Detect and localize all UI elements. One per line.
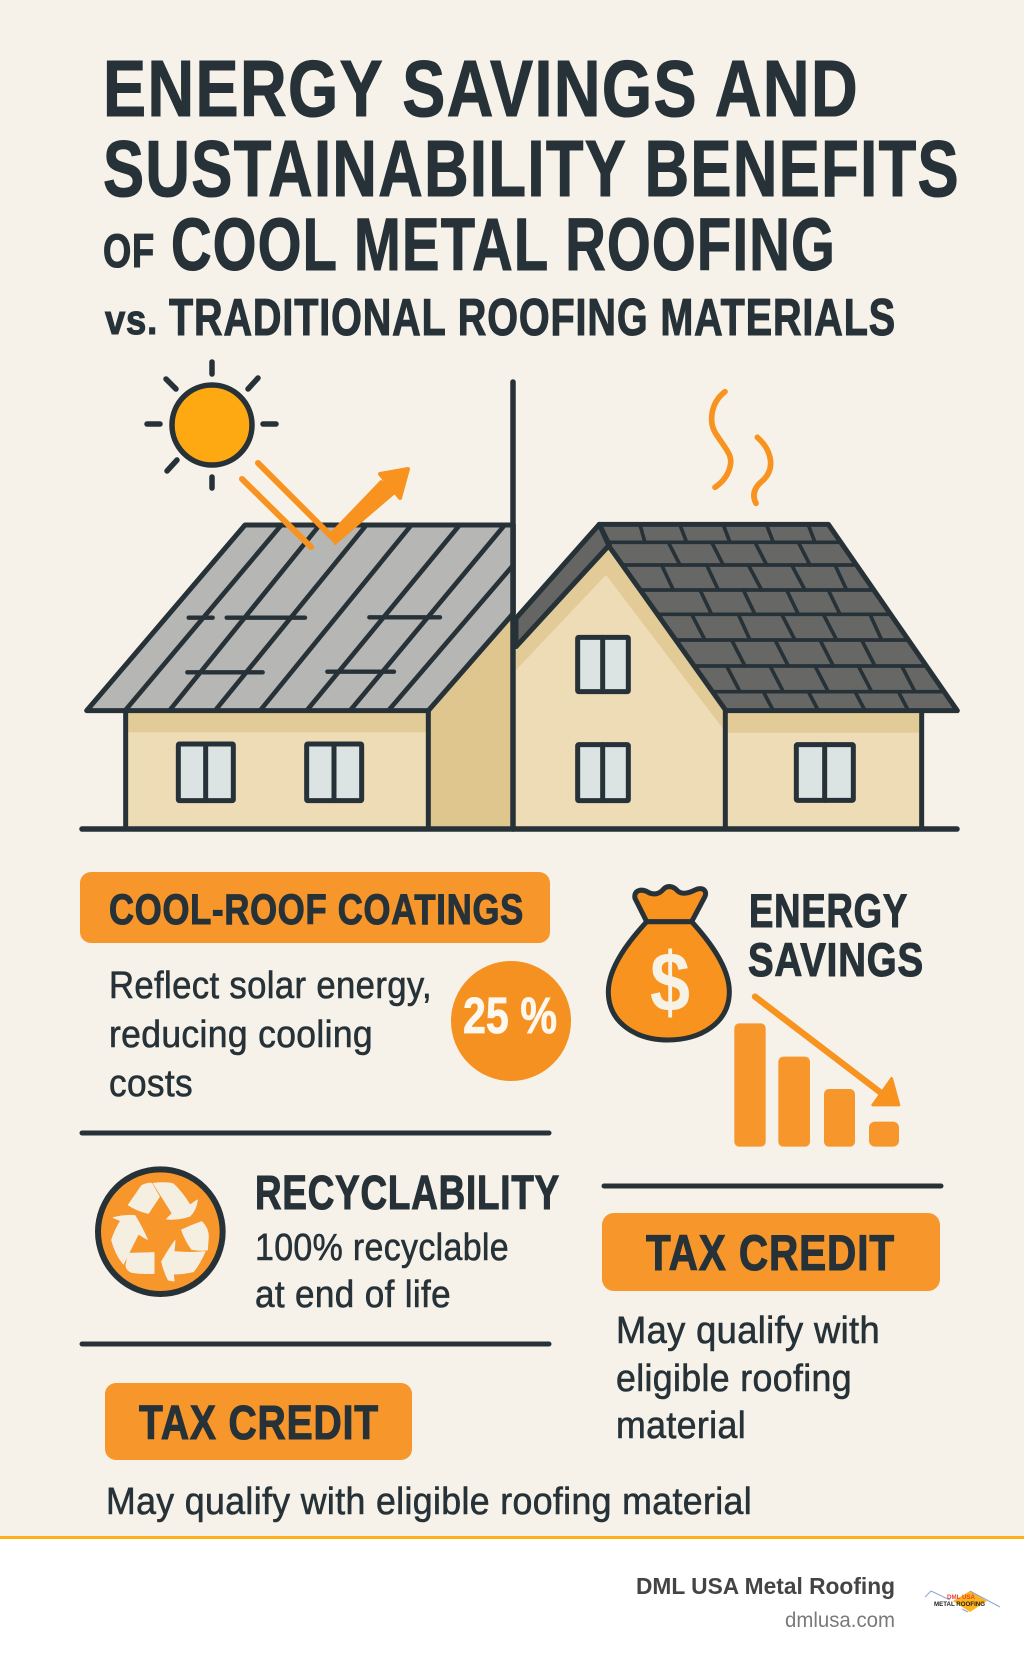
heading <box>748 884 924 986</box>
heading: ENERGY <box>749 884 908 937</box>
window <box>578 637 628 692</box>
divider between houses <box>510 382 516 829</box>
description: May qualify with eligible roofing material <box>106 1481 752 1523</box>
website: dmlusa.com <box>785 1609 895 1632</box>
icon: money bag <box>608 887 729 1040</box>
panel: tax credit left <box>105 1383 752 1523</box>
window <box>178 744 233 801</box>
description <box>109 965 432 1105</box>
icon: heat waves <box>712 392 771 503</box>
panel: tax credit right <box>602 1213 940 1447</box>
panel: energy savings <box>608 884 924 1147</box>
heading pill <box>105 1383 412 1460</box>
shingle roof <box>516 524 957 711</box>
description: 100% recyclable <box>255 1227 509 1269</box>
heading pill: TAX CREDIT <box>646 1225 895 1281</box>
description: material <box>616 1405 746 1447</box>
window <box>796 745 853 800</box>
description: May qualify with <box>616 1310 880 1352</box>
title: COOL METAL ROOFING <box>171 203 836 286</box>
description <box>616 1310 880 1447</box>
description: Reflect solar energy, <box>109 965 432 1007</box>
footer <box>0 1536 1024 1666</box>
window <box>578 745 628 801</box>
description <box>255 1227 509 1316</box>
window <box>307 744 362 801</box>
metal roof <box>87 525 513 711</box>
chart: decreasing bars with arrow <box>734 997 899 1147</box>
heading: SAVINGS <box>748 933 924 986</box>
title <box>103 44 960 347</box>
heading pill: TAX CREDIT <box>139 1397 379 1450</box>
ground line <box>82 826 957 832</box>
heading pill <box>602 1213 940 1291</box>
illustration: right house with shingle roof <box>513 392 957 829</box>
arrow: reflected sunlight <box>242 463 408 547</box>
title: ENERGY SAVINGS AND <box>103 44 859 133</box>
description: reducing cooling <box>109 1014 373 1056</box>
panel: cool-roof coatings <box>80 872 571 1105</box>
title: vs. <box>105 296 158 343</box>
description: at end of life <box>255 1274 451 1316</box>
title: OF <box>103 224 155 277</box>
heading: RECYCLABILITY <box>255 1167 560 1220</box>
icon: recycle <box>98 1169 223 1294</box>
description: eligible roofing <box>616 1358 852 1400</box>
heading pill: COOL-ROOF COATINGS <box>109 886 524 934</box>
badge: 25 percent <box>451 961 571 1081</box>
brand name: DML USA Metal Roofing <box>636 1573 895 1599</box>
heading pill <box>80 872 550 943</box>
logo: DML USA <box>947 1594 975 1601</box>
logo: METAL ROOFING <box>934 1602 985 1608</box>
icon: money bag: $ <box>650 935 690 1029</box>
logo <box>925 1591 1000 1612</box>
panel: recyclability <box>98 1167 560 1316</box>
description: costs <box>109 1063 193 1105</box>
badge: 25 percent: 25 % <box>463 987 557 1044</box>
illustration: left house with metal roof <box>87 525 513 829</box>
icon: sun <box>147 362 276 488</box>
